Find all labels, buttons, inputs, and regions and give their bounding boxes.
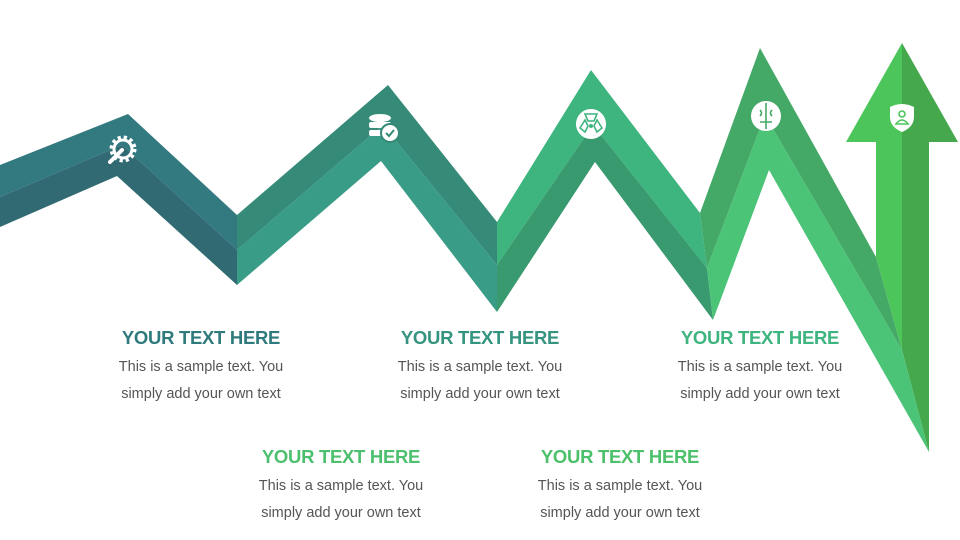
text block 5: YOUR TEXT HERE bbox=[541, 446, 699, 467]
icon: shield user bbox=[890, 104, 914, 132]
segment 3 bbox=[497, 70, 713, 320]
text block 2 bbox=[398, 327, 562, 402]
text block 2: YOUR TEXT HERE bbox=[401, 327, 559, 348]
icon: brain bbox=[751, 101, 781, 131]
text block 3: simply add your own text bbox=[680, 386, 840, 402]
text block 1: simply add your own text bbox=[121, 386, 281, 402]
text block 1: This is a sample text. You bbox=[119, 359, 283, 375]
text block 2: simply add your own text bbox=[400, 386, 560, 402]
text block 3: This is a sample text. You bbox=[678, 359, 842, 375]
text block 1: YOUR TEXT HERE bbox=[122, 327, 280, 348]
text block 4: simply add your own text bbox=[261, 505, 421, 521]
text block 4: YOUR TEXT HERE bbox=[262, 446, 420, 467]
icon: gear wrench bbox=[110, 138, 134, 162]
icon: database check bbox=[369, 114, 399, 142]
text block 2: This is a sample text. You bbox=[398, 359, 562, 375]
segment 2 bbox=[237, 85, 497, 312]
segment 1 bbox=[0, 114, 237, 285]
text block 5: simply add your own text bbox=[540, 505, 700, 521]
segment 4 and arrow bbox=[700, 43, 958, 452]
text block 5: This is a sample text. You bbox=[538, 478, 702, 494]
text block 3 bbox=[678, 327, 842, 402]
text block 4 bbox=[259, 446, 423, 521]
icon: radiation bbox=[576, 109, 606, 139]
text block 1 bbox=[119, 327, 283, 402]
text block 5 bbox=[538, 446, 702, 521]
text block 3: YOUR TEXT HERE bbox=[681, 327, 839, 348]
text block 4: This is a sample text. You bbox=[259, 478, 423, 494]
